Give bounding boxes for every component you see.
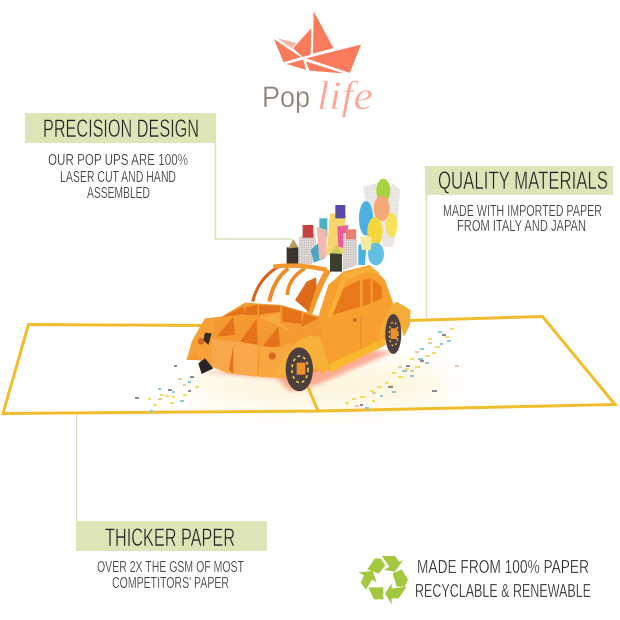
- connector: quality materials: [426, 195, 428, 320]
- balloons and gifts: [287, 179, 400, 272]
- description: COMPETITORS' PAPER: [112, 575, 229, 592]
- heading band: [25, 113, 216, 143]
- logo: [262, 10, 373, 118]
- panel: quality materials: [425, 166, 613, 235]
- confetti: [135, 328, 459, 412]
- heading band: [76, 521, 267, 551]
- panel: thicker paper: [76, 521, 267, 592]
- icon: paper boat: [273, 10, 362, 74]
- logo wordmark: Pop: Pop: [262, 81, 310, 114]
- description: ASSEMBLED: [87, 185, 150, 202]
- hood compartments: [187, 303, 325, 378]
- balloons: [358, 179, 400, 265]
- description: [443, 203, 602, 235]
- recycling text: [415, 557, 591, 601]
- cabin and door side: [318, 265, 393, 372]
- open pop-up card: [2, 316, 616, 414]
- pop-up car: [187, 179, 411, 392]
- description: OUR POP UPS ARE 100%: [48, 152, 188, 169]
- description: OVER 2X THE GSM OF MOST: [97, 559, 244, 576]
- rear fender: [377, 302, 411, 347]
- gifts: [287, 205, 357, 272]
- panel: precision design: [25, 113, 216, 202]
- rear wheel: [385, 314, 401, 354]
- description: LASER CUT AND HAND: [60, 169, 176, 186]
- connector: precision design: [216, 143, 292, 239]
- heading: PRECISION DESIGN: [43, 115, 199, 143]
- heading: THICKER PAPER: [105, 524, 235, 552]
- front fender: [275, 336, 329, 378]
- connector: thicker paper: [76, 414, 78, 521]
- logo wordmark: life: life: [317, 73, 373, 118]
- icon: recycle arrows: [358, 556, 408, 604]
- recycling note: [358, 556, 591, 604]
- description: [97, 559, 244, 592]
- heading band: [425, 166, 613, 195]
- description: [48, 152, 188, 202]
- front wheel: [286, 347, 313, 391]
- car body: [187, 265, 411, 391]
- car shadow: [197, 350, 393, 392]
- roof arches: [253, 266, 328, 313]
